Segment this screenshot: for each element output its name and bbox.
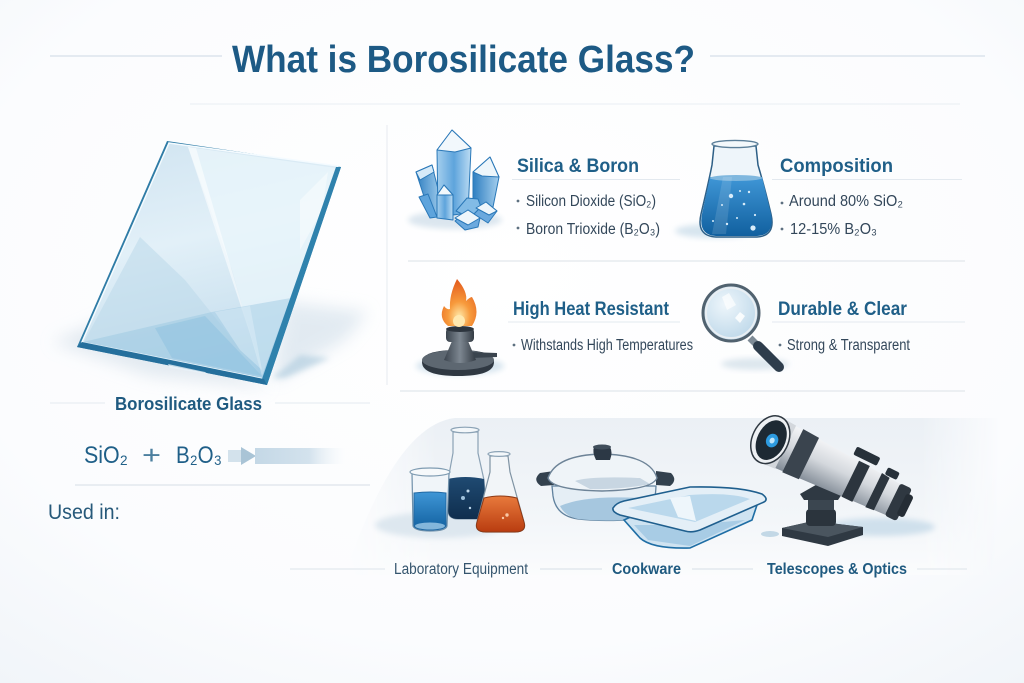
icon: magnifying glass	[703, 285, 789, 370]
bullet list: Withstands High Temperatures	[521, 337, 693, 354]
labels	[290, 561, 967, 578]
bullet list: Boron Trioxide (B₂O₃)	[526, 221, 660, 238]
label: Borosilicate Glass: Borosilicate Glass	[115, 394, 262, 414]
icon: glass cooking pot	[536, 444, 674, 520]
panel: durable and clear	[703, 285, 965, 370]
formula: SiO₂	[84, 442, 128, 469]
icon: laboratory glassware	[410, 427, 525, 532]
icon: telescope	[743, 403, 923, 546]
labels: Cookware	[612, 561, 681, 578]
bullet list	[781, 193, 903, 238]
telescope stand	[782, 482, 863, 546]
labels: Telescopes & Optics	[767, 561, 907, 578]
panel: composition	[675, 140, 962, 238]
heading: Composition	[780, 155, 893, 177]
bullet list: Silicon Dioxide (SiO₂)	[526, 193, 656, 210]
bullet list: Strong & Transparent	[787, 337, 911, 354]
title: What is Borosilicate Glass?	[232, 39, 695, 81]
background band	[374, 418, 962, 542]
formula: +	[142, 440, 161, 470]
panel: heat resistant	[416, 279, 693, 376]
panel: silica and boron	[408, 130, 680, 238]
telescope body	[743, 403, 923, 530]
formula	[84, 440, 345, 470]
heading: Durable & Clear	[778, 298, 907, 320]
bullet list	[517, 193, 660, 238]
labels: Laboratory Equipment	[394, 561, 529, 578]
panel: glass sheet illustration	[52, 141, 368, 388]
heading: Used in: Used in:	[48, 501, 120, 524]
glass pane	[77, 141, 341, 385]
bullet list: Around 80% SiO₂	[789, 193, 903, 210]
bullet list: 12-15% B₂O₃	[790, 221, 877, 238]
arrow	[228, 447, 345, 465]
panel: uses	[290, 415, 967, 578]
icon: flask with liquid	[675, 140, 772, 238]
formula: B₂O₃	[176, 442, 222, 469]
orange flask	[476, 452, 525, 532]
icon: burner with flame	[416, 279, 504, 376]
glass shadow	[52, 302, 368, 388]
heading: High Heat Resistant	[513, 298, 669, 320]
beaker	[410, 468, 450, 531]
icon: crystals	[408, 130, 502, 230]
heading: Silica & Boron	[517, 155, 639, 177]
icon: glass baking dish	[613, 487, 766, 548]
tall flask	[448, 427, 486, 519]
